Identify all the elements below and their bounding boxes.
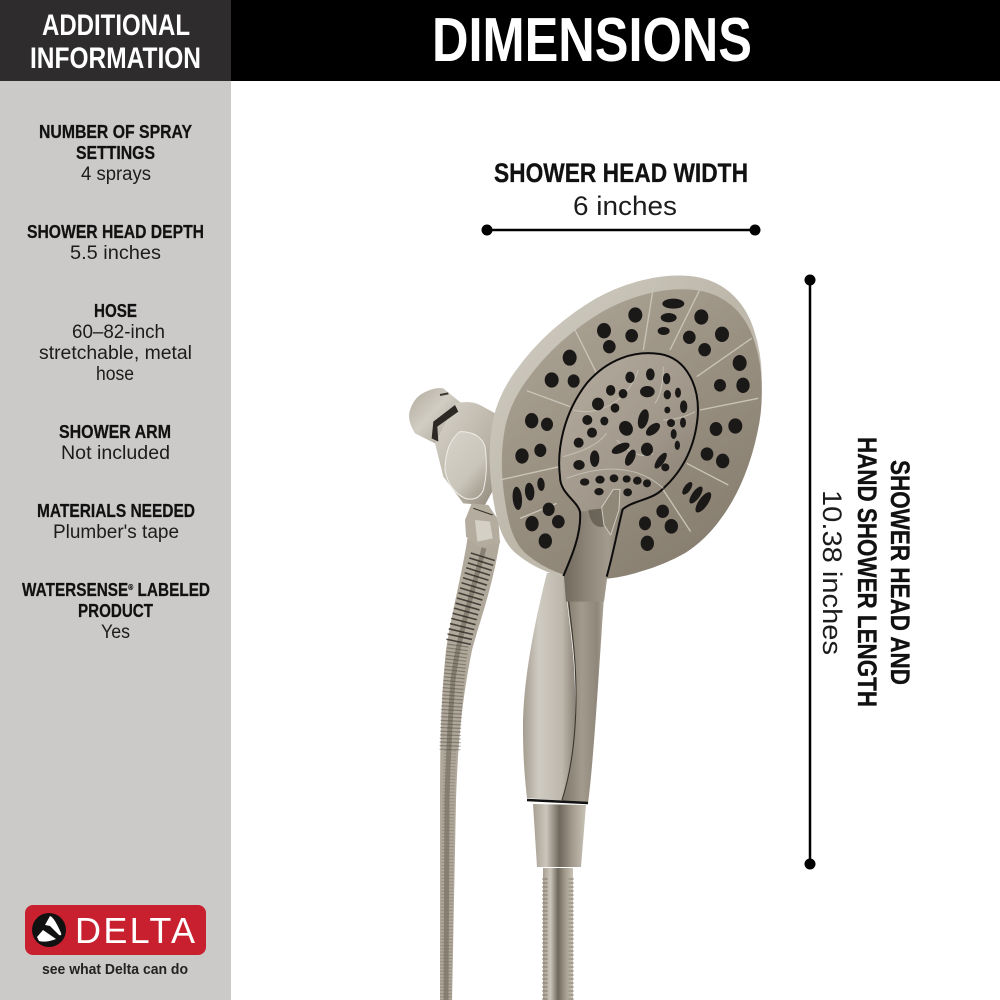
spec: shower head depth: SHOWER HEAD DEPTH xyxy=(27,222,204,242)
spec: hose: 60–82-inch xyxy=(72,322,165,343)
shower head, drawn at 3x coordinates xyxy=(409,276,762,602)
spec: watersense xyxy=(22,580,210,643)
sidebar background xyxy=(0,0,231,1000)
title: DIMENSIONS xyxy=(432,6,752,75)
inner disc outline xyxy=(559,353,698,577)
sidebar header: ADDITIONAL xyxy=(42,9,190,42)
spec: spray settings: SETTINGS xyxy=(76,143,155,163)
spec: hose: stretchable, metal xyxy=(39,343,192,364)
spec: spray settings xyxy=(39,122,192,185)
product: shower head and hose xyxy=(409,276,762,1000)
trigger xyxy=(602,489,620,535)
hose: lower xyxy=(543,868,573,1000)
spec: shower arm: Not included xyxy=(61,443,170,464)
handle: ridge line xyxy=(562,575,576,800)
handle: collar xyxy=(533,804,586,867)
spec: watersense: LABELED xyxy=(133,580,210,600)
spec: shower arm xyxy=(59,422,171,464)
spec: hose: hose xyxy=(96,364,134,385)
header bar xyxy=(0,0,1000,81)
width heading: SHOWER HEAD WIDTH xyxy=(494,158,748,188)
logo: Delta xyxy=(25,905,206,978)
outer nozzles xyxy=(512,299,750,551)
handle: dark front section xyxy=(562,570,606,803)
length label: 10.38 inches xyxy=(817,490,847,655)
spec: shower head depth: 5.5 inches xyxy=(70,243,161,264)
hose: left xyxy=(440,535,500,1000)
inner nozzles xyxy=(573,368,687,496)
spec: materials needed: Plumber's tape xyxy=(53,522,179,543)
spec: shower head depth xyxy=(27,222,204,264)
length dimension line xyxy=(804,274,816,870)
length label: HAND SHOWER LENGTH xyxy=(852,437,882,707)
spec: hose: HOSE xyxy=(94,301,137,321)
width dimension line xyxy=(482,224,760,236)
spec: spray settings: 4 sprays xyxy=(81,164,151,185)
length label: SHOWER HEAD AND xyxy=(885,460,915,685)
arm mount xyxy=(409,388,500,547)
spec: watersense: ® xyxy=(128,583,133,592)
spec: watersense: WATERSENSE xyxy=(22,580,147,600)
spec: materials needed xyxy=(37,501,195,543)
handle neck xyxy=(564,507,623,602)
face segment lines xyxy=(500,287,758,532)
handle: black ring xyxy=(527,800,588,803)
spec: spray settings: NUMBER OF SPRAY xyxy=(39,122,192,142)
logo: Delta: DELTA xyxy=(75,910,195,951)
inner disc dividers xyxy=(563,367,695,488)
spec: watersense: PRODUCT xyxy=(78,601,153,621)
width heading xyxy=(494,158,748,221)
rim xyxy=(490,276,762,579)
sidebar header xyxy=(0,0,231,81)
handle: light back section xyxy=(523,573,575,801)
spec: watersense: Yes xyxy=(101,622,130,643)
inner spray disc xyxy=(559,353,698,512)
length label xyxy=(817,437,915,707)
neck shadow xyxy=(588,508,604,527)
face xyxy=(502,289,762,579)
spec: materials needed: MATERIALS NEEDED xyxy=(37,501,195,521)
spec: hose xyxy=(39,301,192,385)
width heading: 6 inches xyxy=(573,191,677,221)
sidebar header: INFORMATION xyxy=(30,42,201,75)
spec: shower arm: SHOWER ARM xyxy=(59,422,171,442)
logo: Delta: see what Delta can do xyxy=(42,961,188,978)
